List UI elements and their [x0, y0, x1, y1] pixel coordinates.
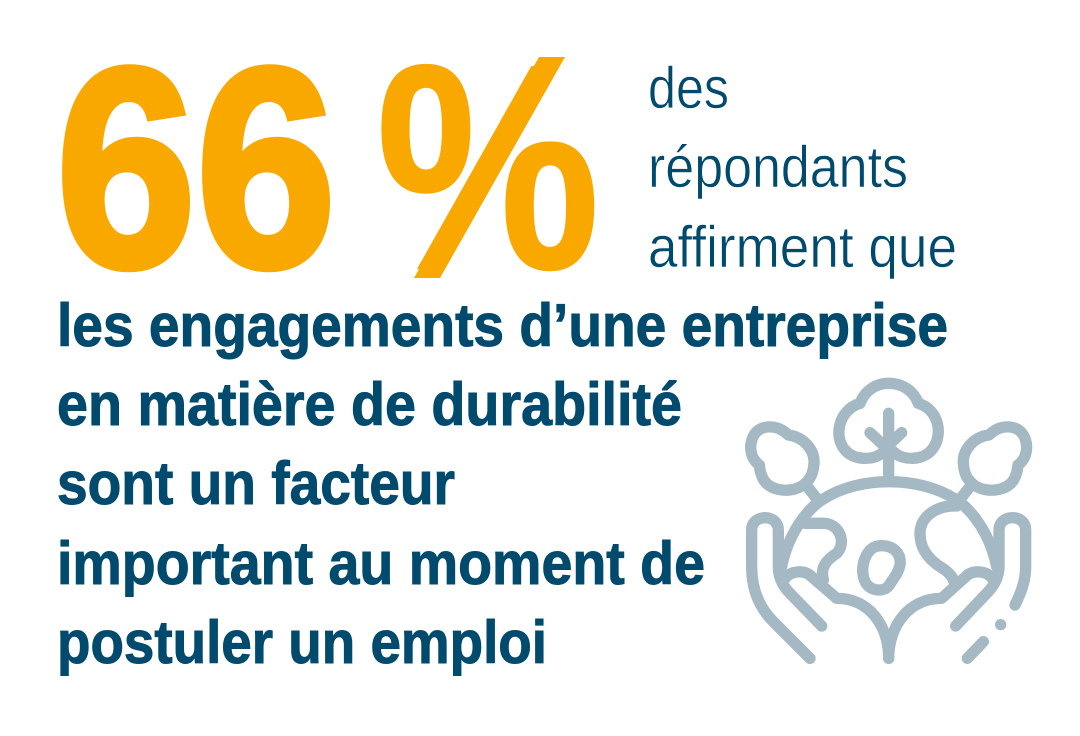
main statement	[57, 292, 948, 676]
icon: hands holding a globe with trees	[751, 383, 1027, 658]
percent sign: %	[376, 4, 600, 330]
main statement: postuler un emploi	[57, 609, 547, 676]
icon: centre tree	[839, 383, 938, 480]
percent sign: extended slash	[414, 57, 565, 278]
number 66: 66	[56, 10, 336, 327]
icon: right tree	[959, 427, 1027, 501]
intro text: répondants	[648, 135, 908, 200]
big statistic: 66 %	[56, 4, 600, 330]
icon: dot	[995, 619, 1006, 630]
icon: left tree	[751, 427, 818, 501]
main statement: important au moment de	[57, 530, 705, 597]
icon: right hand	[889, 518, 1026, 658]
main statement: en matière de durabilité	[57, 371, 682, 438]
intro text: des	[648, 56, 729, 121]
main statement: les engagements d’une entreprise	[57, 292, 948, 359]
intro text	[648, 56, 957, 280]
icon: globe outline and continents	[782, 482, 997, 590]
intro text: affirment que	[648, 215, 957, 280]
main statement: sont un facteur	[57, 450, 455, 517]
icon: left hand	[752, 518, 889, 658]
